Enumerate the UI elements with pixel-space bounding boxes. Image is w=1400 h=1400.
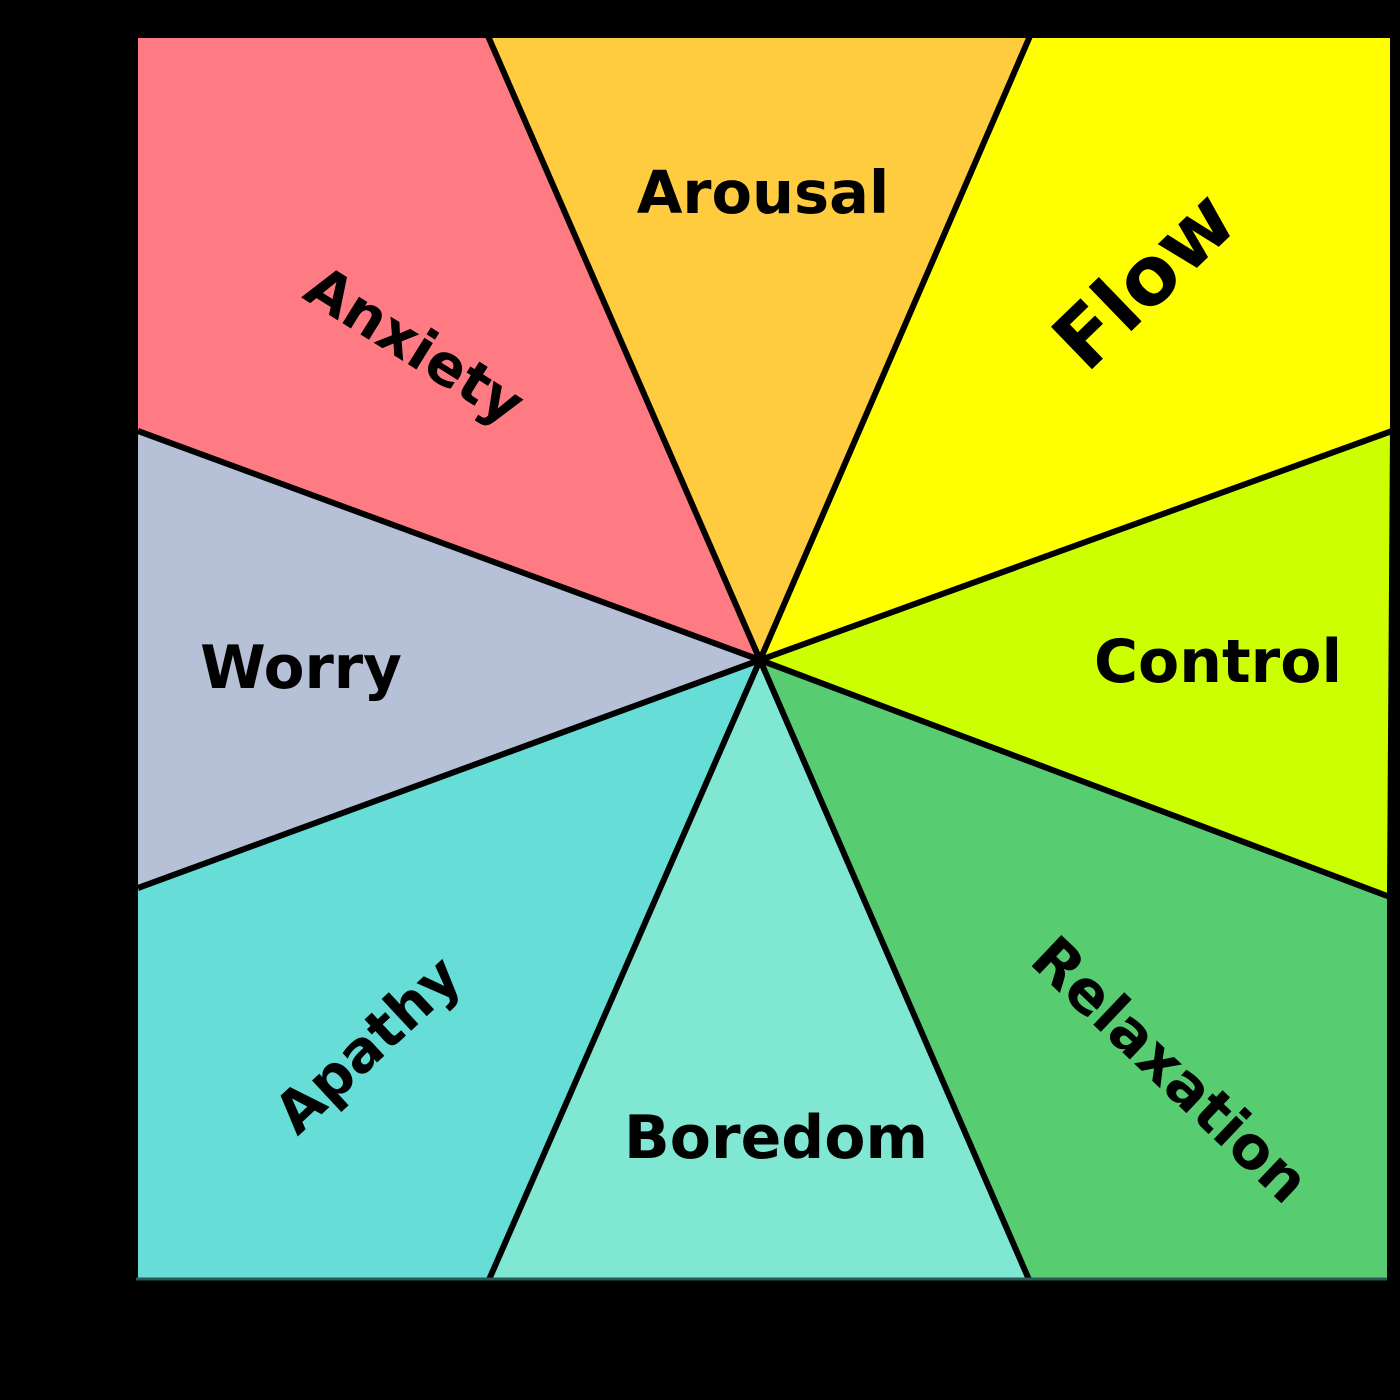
sector: apathy	[138, 660, 760, 1280]
label: flow: Flow	[1035, 173, 1254, 389]
sector: anxiety	[138, 38, 760, 660]
sector: control	[760, 431, 1390, 893]
sector: arousal	[490, 38, 1030, 660]
label: arousal: Arousal	[637, 158, 889, 227]
label: apathy: Apathy	[262, 943, 474, 1147]
sector: boredom	[490, 660, 1030, 1280]
label: control: Control	[1094, 627, 1342, 697]
sector: flow	[760, 38, 1390, 660]
divider lines	[138, 36, 1392, 1282]
label: anxiety: Anxiety	[293, 253, 535, 439]
label: worry: Worry	[200, 634, 402, 703]
label: relaxation: Relaxation	[1018, 923, 1323, 1217]
sector: worry	[138, 431, 760, 888]
sector: relaxation	[760, 660, 1387, 1280]
label: boredom: Boredom	[624, 1103, 928, 1173]
bottom edge	[136, 1278, 1387, 1280]
